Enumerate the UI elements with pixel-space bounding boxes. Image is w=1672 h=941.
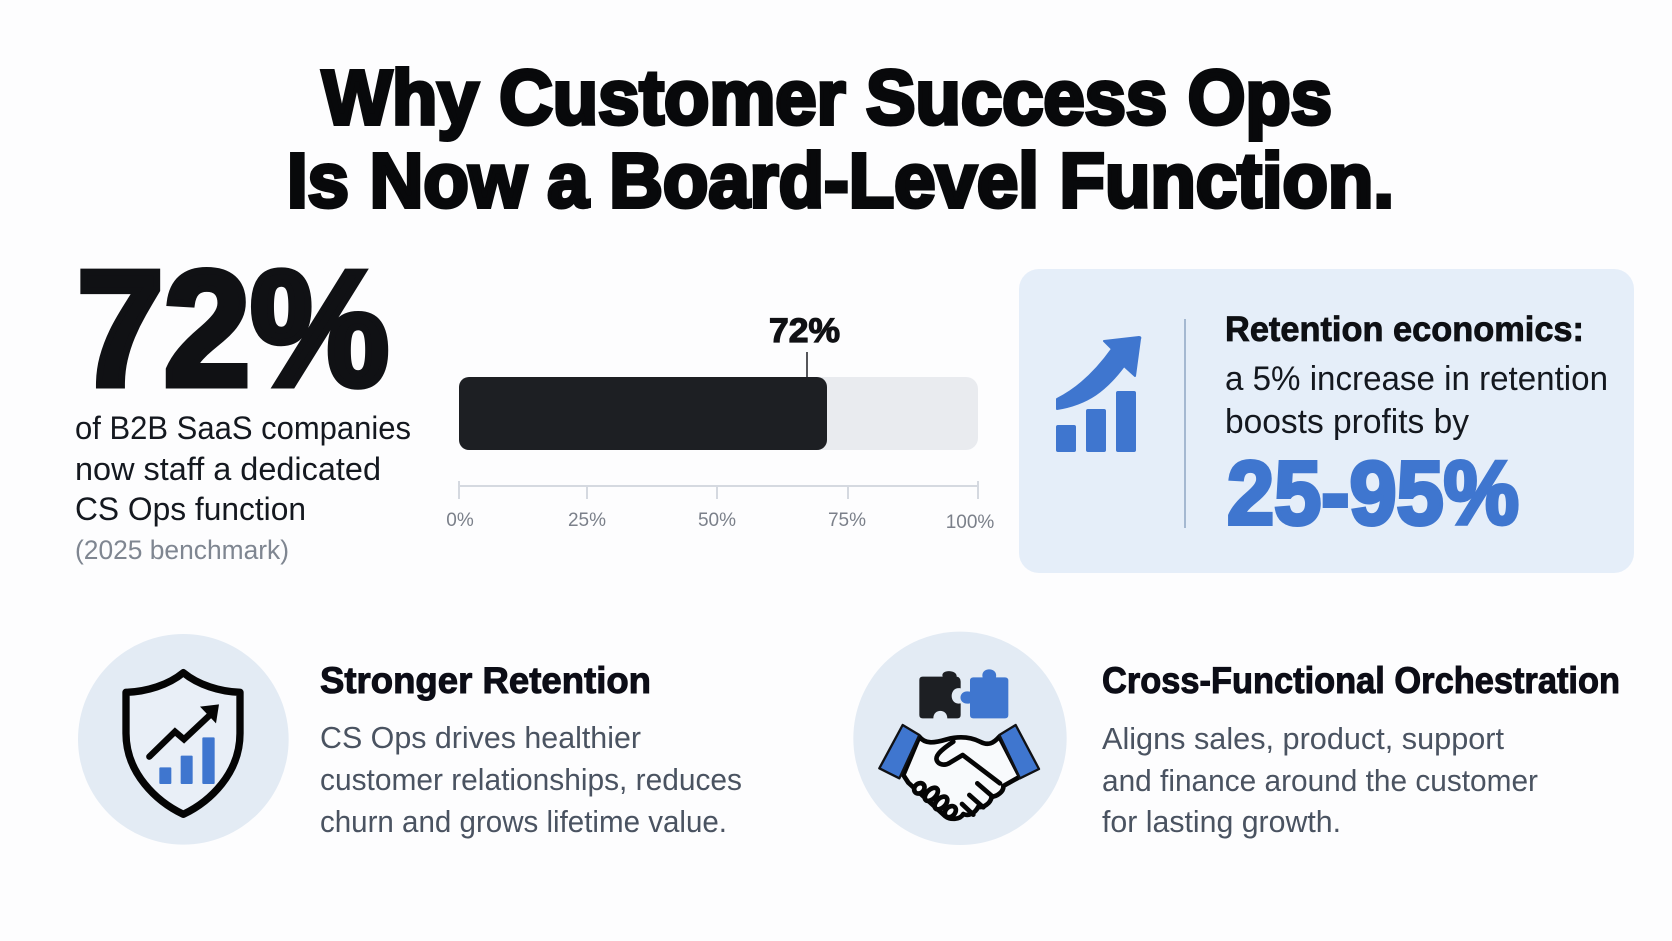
panel: retention economics [1019, 269, 1634, 573]
stat description [75, 410, 411, 565]
axis labels: 25% [568, 510, 606, 531]
panel stat: 25-95% [1227, 444, 1519, 544]
axis labels: 50% [698, 510, 736, 531]
card body: Aligns sales, product, support [1102, 721, 1504, 756]
card body [320, 720, 742, 839]
bar track [459, 377, 978, 450]
bar label: 72% [769, 312, 840, 350]
panel heading: Retention economics: [1225, 310, 1584, 349]
card: cross-functional orchestration [1102, 660, 1620, 839]
card body: CS Ops drives healthier [320, 720, 641, 755]
card body: churn and grows lifetime value. [320, 804, 727, 839]
card body: customer relationships, reduces [320, 762, 742, 797]
panel body text [1225, 360, 1608, 441]
stat description: CS Ops function [75, 491, 306, 527]
title: Is Now a Board-Level Function. [287, 138, 1394, 224]
panel body text: boosts profits by [1225, 403, 1469, 441]
axis labels [446, 510, 994, 533]
cuffs [879, 725, 1039, 778]
axis labels: 0% [446, 510, 474, 531]
card: stronger retention [320, 660, 742, 839]
card heading: Cross-Functional Orchestration [1102, 660, 1620, 701]
big stat: 72%: 72% [77, 237, 389, 420]
card body: for lasting growth. [1102, 804, 1341, 839]
icon: growth chart with arrow [1056, 337, 1140, 452]
icon: shield with growth chart [78, 634, 289, 845]
card heading: Stronger Retention [320, 660, 651, 701]
title: Why Customer Success Ops [322, 55, 1332, 141]
title [287, 55, 1394, 224]
puzzle piece blue [960, 669, 1008, 718]
panel body text: a 5% increase in retention [1225, 360, 1608, 398]
stat description: of B2B SaaS companies [75, 410, 411, 446]
bar fill 72% [459, 377, 827, 450]
leader line [806, 352, 808, 377]
stat description: now staff a dedicated [75, 451, 381, 487]
axis labels: 75% [828, 510, 866, 531]
axis labels: 100% [946, 512, 994, 533]
card body [1102, 721, 1538, 839]
progress bar chart [446, 312, 994, 533]
axis [459, 481, 978, 499]
hands [903, 737, 1020, 819]
stat description: (2025 benchmark) [75, 535, 289, 565]
puzzle piece dark [919, 671, 961, 718]
icon: handshake with puzzle pieces [853, 632, 1067, 845]
card body: and finance around the customer [1102, 763, 1538, 798]
